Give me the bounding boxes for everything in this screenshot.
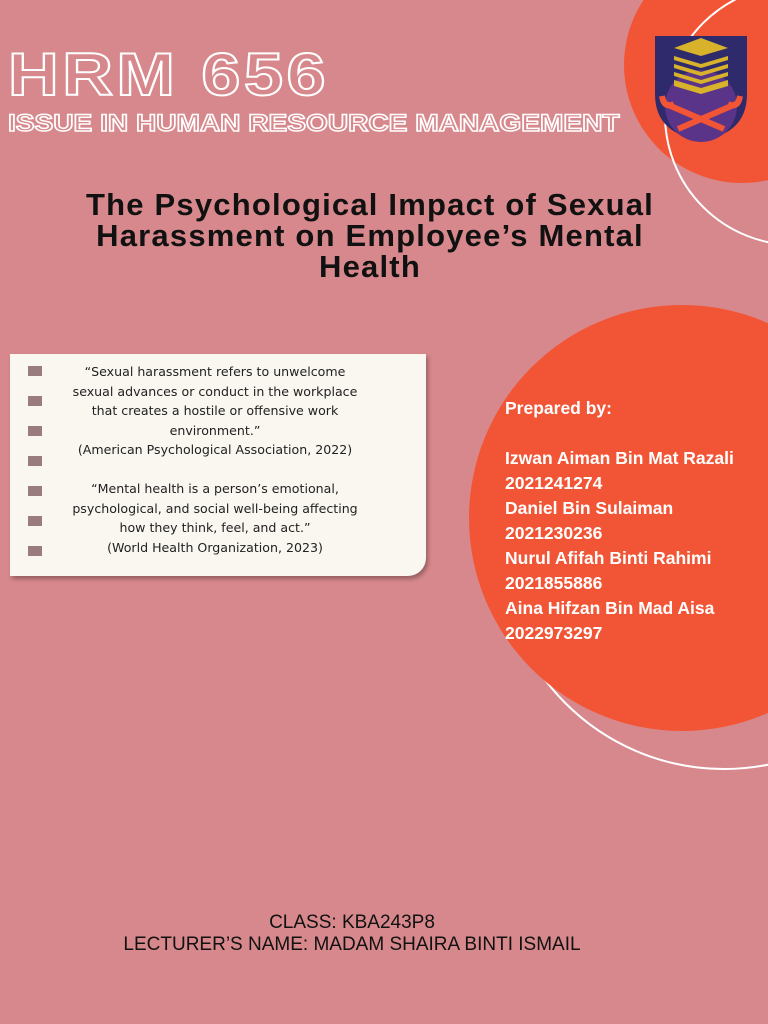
note holes [28,366,42,556]
text block: prepared by: Aina Hifzan Bin Mad Aisa [505,598,714,618]
text block: class and lecturer: CLASS: KBA243P8 [269,912,435,933]
text block: definitions [72,364,358,554]
text block: definitions: sexual advances or conduct in the workplace [73,384,357,398]
text block: definitions: environment.” [170,422,260,438]
text block: prepared by: Nurul Afifah Binti Rahimi [505,548,711,568]
heading: main title: Harassment on Employee’s Mental [96,218,644,253]
heading: main title: The Psychological Impact of Sexual [86,187,654,222]
subtitle: ISSUE IN HUMAN RESOURCE MANAGEMENT [8,110,620,137]
text block: definitions: that creates a hostile or offensive work [92,403,338,418]
text block: class and lecturer: LECTURER’S NAME: MADAM SHAIRA BINTI ISMAIL [123,934,581,955]
text block: prepared by: Izwan Aiman Bin Mat Razali [505,448,734,468]
heading: main title [86,187,654,284]
text block: prepared by [505,398,734,643]
text block: definitions: psychological, and social well-being affecting [72,500,358,516]
text block: definitions: (American Psychological Association, 2022) [78,442,352,457]
text block: prepared by: 2021241274 [505,473,602,493]
text block: definitions: how they think, feel, and act.” [119,520,311,535]
panel: definitions note [10,354,426,576]
text block: definitions: (World Health Organization, 2023) [107,540,323,554]
text block: prepared by: Daniel Bin Sulaiman [505,498,673,518]
heading: main title: Health [319,249,421,284]
icon: university logo [655,36,747,142]
text block: prepared by: 2021855886 [505,573,602,593]
text block: prepared by: 2021230236 [505,523,602,543]
text block: prepared by: 2022973297 [505,623,602,643]
text block: definitions: “Sexual harassment refers to unwelcome [85,364,345,379]
text block: prepared by: Prepared by: [505,398,612,418]
text block: definitions: “Mental health is a person’s emotional, [91,481,339,496]
text block: class and lecturer [123,912,581,955]
